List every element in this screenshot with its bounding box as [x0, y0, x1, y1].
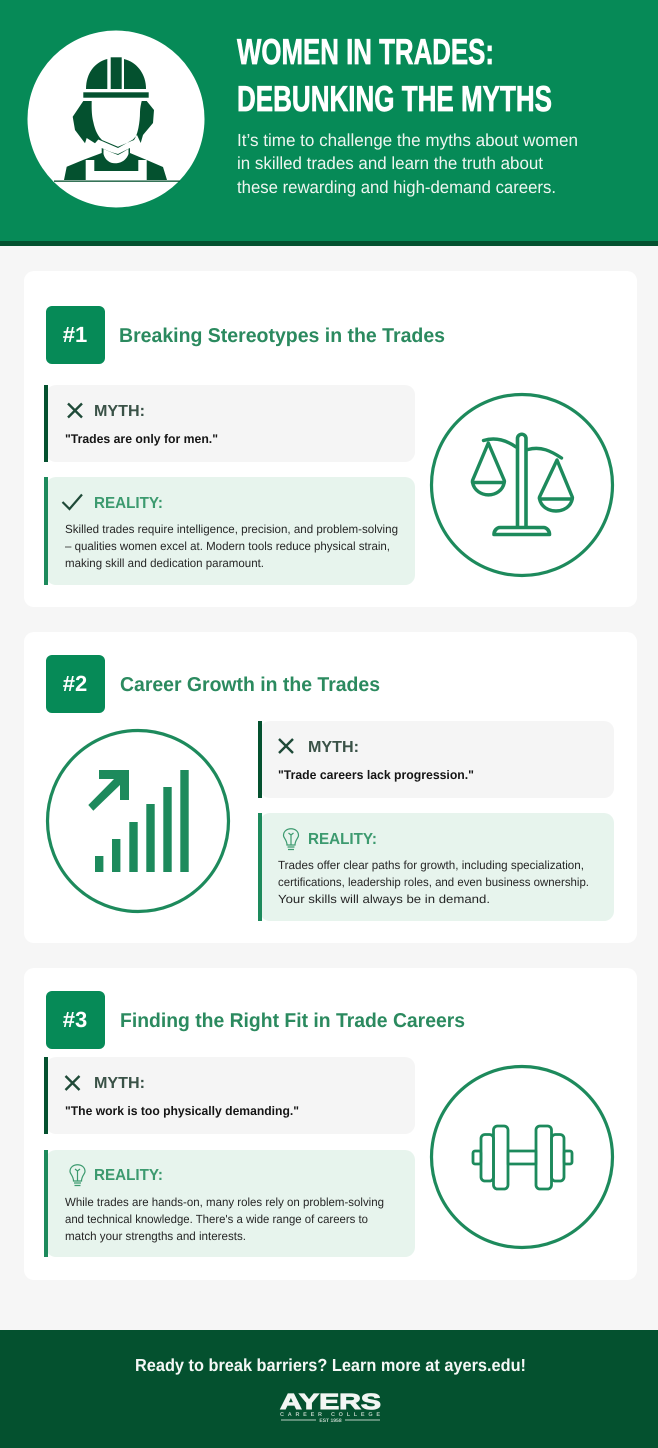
reality box 1: making skill and dedication paramount.	[65, 556, 264, 570]
reality box 2: Trades offer clear paths for growth, including specialization,	[278, 858, 584, 872]
icon: woman worker with hard hat	[28, 30, 204, 208]
reality box 2	[258, 813, 614, 921]
number badge 2	[46, 655, 105, 713]
number badge 3	[46, 991, 105, 1049]
footer banner	[0, 1330, 658, 1448]
myth box 2	[258, 721, 614, 798]
reality box 1: – qualities women excel at. Modern tools reduce physical strain,	[65, 539, 390, 553]
section heading 2: Career Growth in the Trades	[120, 674, 380, 696]
logo: Ayers Career College: CAREER COLLEGE	[280, 1412, 380, 1418]
title: WOMEN IN TRADES:	[237, 31, 494, 72]
section heading 3: Finding the Right Fit in Trade Careers	[120, 1010, 465, 1032]
icon: light bulb	[284, 829, 298, 850]
reality box 2: REALITY:	[308, 831, 377, 848]
panel: section 3 finding the right fit	[24, 968, 637, 1280]
panel: section 1 breaking stereotypes	[24, 271, 637, 607]
myth box 1	[44, 385, 415, 462]
icon: cross	[66, 1076, 80, 1090]
reality box 3: REALITY:	[94, 1167, 163, 1184]
number badge 3: #3	[63, 1007, 87, 1032]
number badge 2: #2	[63, 671, 87, 696]
reality box 3: and technical knowledge. There's a wide range of careers to	[65, 1212, 368, 1226]
logo: Ayers Career College: EST 1958	[319, 1418, 342, 1424]
reality box 1: Skilled trades require intelligence, precision, and problem-solving	[65, 522, 398, 536]
intro text: It’s time to challenge the myths about women	[237, 130, 578, 150]
panel: section 2 career growth	[24, 632, 637, 943]
icon: balance scales in circle	[432, 394, 612, 576]
intro text: these rewarding and high-demand careers.	[237, 177, 556, 197]
icon: growth chart in circle	[48, 730, 228, 912]
section heading 1: Breaking Stereotypes in the Trades	[119, 325, 445, 347]
icon: light bulb	[70, 1165, 85, 1186]
number badge 1: #1	[63, 322, 87, 347]
reality box 2: Your skills will always be in demand.	[278, 892, 490, 906]
reality box 3	[44, 1150, 415, 1257]
intro text	[237, 130, 578, 197]
icon: cross	[279, 739, 293, 753]
myth box 1: "Trades are only for men."	[65, 432, 218, 446]
myth box 3: "The work is too physically demanding."	[65, 1104, 299, 1118]
reality box 2: certifications, leadership roles, and even business ownership.	[278, 875, 589, 889]
logo: Ayers Career College	[280, 1389, 381, 1424]
icon: dumbbell in circle	[432, 1066, 612, 1248]
title	[237, 31, 552, 119]
myth box 1: MYTH:	[94, 403, 145, 420]
icon: check mark	[62, 494, 82, 509]
myth box 3: MYTH:	[94, 1075, 145, 1092]
myth box 2: MYTH:	[308, 739, 359, 756]
reality box 1: REALITY:	[94, 495, 163, 512]
intro text: in skilled trades and learn the truth about	[237, 153, 543, 173]
logo: Ayers Career College: AYERS	[280, 1389, 381, 1414]
reality box 1	[44, 477, 415, 585]
call to action: Ready to break barriers? Learn more at ayers.edu!	[135, 1355, 526, 1375]
icon: cross	[68, 404, 82, 418]
myth box 2: "Trade careers lack progression."	[278, 768, 474, 782]
myth box 3	[44, 1057, 415, 1134]
header banner	[0, 0, 658, 246]
reality box 3: match your strengths and interests.	[65, 1229, 246, 1243]
number badge 1	[46, 306, 105, 364]
reality box 3: While trades are hands-on, many roles rely on problem-solving	[65, 1195, 384, 1209]
